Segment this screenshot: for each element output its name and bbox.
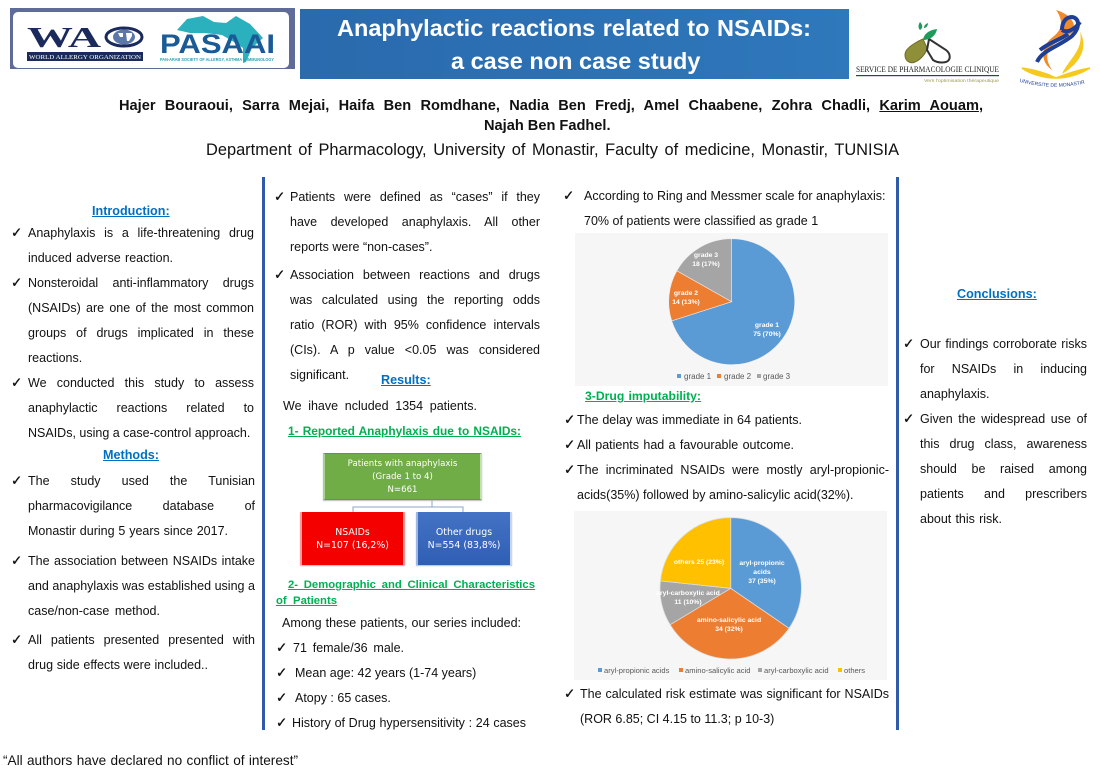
- bullet: hypersensitivity: ✓: [276, 715, 287, 731]
- bullet: ROR association: Association between reactions and drugs: [290, 268, 540, 282]
- bullet: association method: The association between NSAIDs intake: [28, 554, 255, 568]
- heading: methods: Methods:: [103, 448, 159, 462]
- bullet: incriminated NSAIDs: The incriminated NSAIDs were mostly aryl-propionic-: [577, 463, 889, 477]
- pie labels: 18 (17%): [692, 261, 720, 268]
- pie labels: [672, 252, 781, 338]
- legend: grade 2: [724, 372, 752, 381]
- bullet: sex ratio: 71 female/36 male.: [293, 641, 404, 655]
- slice: grade 3: [677, 239, 732, 302]
- logo: Service de pharmacologie clinique: Vers l'optimisation thérapeutique: [924, 78, 999, 83]
- pie labels: 14 (13%): [672, 299, 700, 306]
- bullet: database: ✓: [11, 473, 22, 489]
- bullet: Ring and Messmer: 70% of patients were classified as grade 1: [584, 214, 818, 228]
- logo banner: WAO and PASAAI: PASAAI: [160, 29, 275, 59]
- bullet: inclusion: [11, 632, 255, 672]
- bullet: risk estimate: [564, 686, 889, 726]
- text: Najah Ben Fadhel.: [484, 118, 611, 134]
- logo banner: WAO and PASAAI: PAN-ARAB SOCIETY OF ALLERGY, ASTHMA & IMMUNOLOGY: [160, 57, 274, 62]
- bullet: risk estimate: The calculated risk estimate was significant for NSAIDs: [580, 687, 889, 701]
- heading: demographic characteristics: 2- Demographic and Clinical Characteristics: [288, 579, 535, 591]
- bullet: risk estimate: ✓: [564, 686, 575, 702]
- bullet: study aim: NSAIDs, using a case-control approach.: [28, 426, 250, 440]
- bullet: NSAIDs: [11, 275, 254, 365]
- bullet: inclusion: All patients presented presented with: [28, 633, 255, 647]
- bullet: ROR association: significant.: [290, 368, 349, 382]
- pie labels: aryl-carboxylic acid: [656, 590, 720, 597]
- bullet: case definition: have developed anaphylaxis. All other: [290, 215, 540, 229]
- bullet: mean age: ✓: [276, 665, 287, 681]
- bullet: findings: for NSAIDs in inducing: [920, 362, 1087, 376]
- heading: conclusions: Conclusions:: [957, 287, 1037, 301]
- bullet: ROR association: (CIs). A p value <0.05 was considered: [290, 343, 540, 357]
- legend: amino-salicylic acid: [685, 666, 750, 675]
- bullet: NSAIDs: Nonsteroidal anti-inflammatory drugs: [28, 276, 254, 290]
- box: NSAIDs: [300, 512, 405, 565]
- pie labels: 37 (35%): [748, 578, 776, 585]
- legend: aryl-propionic acids: [604, 666, 670, 675]
- logo banner: WAO and PASAAI: WORLD ALLERGY ORGANIZATION: [29, 54, 141, 61]
- affiliation: Department of Pharmacology, University of Monastir, Faculty of medicine, Monastir, TUNISIA: [206, 141, 899, 159]
- bullet: incriminated NSAIDs: ✓: [564, 462, 575, 478]
- logo: Service de pharmacologie clinique: SERVICE DE PHARMACOLOGIE CLINIQUE: [856, 64, 999, 74]
- bullet: anaphylaxis definition: Anaphylaxis is a life-threatening drug: [28, 226, 254, 240]
- bullet: anaphylaxis definition: induced adverse reaction.: [28, 251, 173, 265]
- legend: others: [844, 666, 865, 675]
- slice: others: [660, 518, 731, 588]
- bullet: association method: and anaphylaxis was established using a: [28, 579, 255, 593]
- bullet: awareness: Given the widespread use of: [920, 412, 1087, 426]
- bullet: database: pharmacovigilance database of: [28, 499, 255, 513]
- bullet: NSAIDs: groups of drugs implicated in these: [28, 326, 254, 340]
- bullet: awareness: patients and prescribers: [920, 487, 1087, 501]
- bullet: hypersensitivity: History of Drug hypersensitivity : 24 cases: [292, 716, 526, 730]
- divider right: [896, 177, 899, 730]
- bullet: Ring and Messmer: [563, 188, 886, 228]
- bullet: study aim: ✓: [11, 375, 22, 391]
- heading: drug imputability: 3-Drug imputability:: [585, 389, 701, 403]
- text: patients included: We ihave ncluded 1354 patients.: [283, 399, 477, 413]
- bullet: incriminated NSAIDs: [564, 462, 889, 502]
- slice: aryl-carboxylic acid: [660, 581, 731, 625]
- bullet: NSAIDs: reactions.: [28, 351, 82, 365]
- bullet: sex ratio: ✓: [276, 640, 287, 656]
- bullet: findings: anaphylaxis.: [920, 387, 990, 401]
- pie labels: acids: [753, 569, 771, 576]
- slice: aryl-propionic acids: [731, 518, 801, 628]
- bullet: case definition: Patients were defined as “cases” if they: [290, 190, 540, 204]
- pie labels: 34 (32%): [715, 626, 743, 633]
- pie labels: [656, 559, 785, 633]
- bullet: atopy: Atopy : 65 cases.: [295, 691, 391, 705]
- pie labels: others 25 (23%): [674, 559, 724, 566]
- flowchart: [300, 453, 512, 566]
- pie labels: 75 (70%): [753, 331, 781, 338]
- bullet: case definition: [274, 189, 540, 254]
- title banner: a case non case study: [451, 48, 700, 74]
- pie labels: grade 1: [755, 322, 779, 329]
- flowchart connectors: [352, 500, 464, 512]
- heading: reported anaphylaxis: 1- Reported Anaphylaxis due to NSAIDs:: [288, 424, 521, 438]
- bullet: study aim: anaphylactic reactions related to: [28, 401, 254, 415]
- bullet: findings: [903, 336, 1087, 401]
- title banner: [300, 9, 849, 79]
- authors: [119, 98, 983, 134]
- bullet: database: The study used the Tunisian: [28, 474, 255, 488]
- box: other drugs: [416, 512, 512, 565]
- logo: Université de Monastir: UNIVERSITE DE MONASTIR: [1020, 78, 1085, 87]
- bullet: anaphylaxis definition: ✓: [11, 225, 22, 241]
- bullet: awareness: about this risk.: [920, 512, 1002, 526]
- bullet: outcome: ✓: [564, 437, 575, 453]
- box: patients with anaphylaxis: (Grade 1 to 4): [372, 472, 433, 482]
- box: other drugs: Other drugs: [436, 527, 492, 538]
- box: other drugs: N=554 (83,8%): [428, 540, 500, 551]
- chart: NSAID class pie: [574, 511, 887, 680]
- bullet: Ring and Messmer: According to Ring and Messmer scale for anaphylaxis:: [584, 189, 886, 203]
- slice: grade 1: [672, 239, 795, 365]
- bullet: database: [11, 473, 255, 538]
- logo banner: WAO and PASAAI: [10, 8, 295, 69]
- pie labels: 11 (10%): [674, 599, 702, 606]
- legend: grade 1: [684, 372, 712, 381]
- heading: introduction: Introduction:: [92, 204, 170, 218]
- box: patients with anaphylaxis: [323, 453, 482, 500]
- legend: aryl-carboxylic acid: [764, 666, 829, 675]
- pie labels: grade 3: [694, 252, 718, 259]
- bullet: awareness: this drug class, awareness: [920, 437, 1087, 451]
- bullet: inclusion: ✓: [11, 632, 22, 648]
- authors: Hajer Bouraoui, Sarra Mejai, Haifa Ben Romdhane, Nadia Ben Fredj, Amel Chaabene, Zohra Chadli, Karim Aouam,: [119, 98, 983, 114]
- bullet: association method: case/non-case method.: [28, 604, 160, 618]
- logo: Service de pharmacologie clinique: [856, 22, 999, 83]
- pie labels: aryl-propionic: [739, 560, 785, 567]
- bullet: Ring and Messmer: ✓: [563, 188, 574, 204]
- bullet: study aim: We conducted this study to assess: [28, 376, 254, 390]
- bullet: ROR association: ✓: [274, 267, 285, 283]
- legend: grade 3: [763, 372, 791, 381]
- bullet: ROR association: [274, 267, 540, 382]
- heading: demographic characteristics: of Patients: [276, 595, 337, 607]
- bullet: ROR association: ratio (ROR) with 95% confidence intervals: [290, 318, 540, 332]
- bullet: anaphylaxis definition: [11, 225, 254, 265]
- box: patients with anaphylaxis: N=661: [387, 485, 418, 495]
- bullet: NSAIDs: (NSAIDs) are one of the most common: [28, 301, 254, 315]
- bullet: inclusion: drug side effects were included..: [28, 658, 208, 672]
- box: NSAIDs: N=107 (16,2%): [316, 540, 389, 551]
- bullet: association method: [11, 553, 255, 618]
- pie labels: amino-salicylic acid: [697, 617, 761, 624]
- title banner: Anaphylactic reactions related to NSAIDs:: [337, 15, 811, 41]
- heading: results: Results:: [381, 373, 431, 387]
- bullet: association method: ✓: [11, 553, 22, 569]
- heading: demographic characteristics: [276, 579, 535, 607]
- bullet: delay: ✓: [564, 412, 575, 428]
- bullet: incriminated NSAIDs: acids(35%) followed by amino-salicylic acid(32%).: [577, 488, 854, 502]
- logo banner: WAO and PASAAI: WA: [27, 22, 101, 54]
- box: patients with anaphylaxis: Patients with anaphylaxis: [348, 459, 457, 469]
- bullet: study aim: [11, 375, 254, 440]
- bullet: mean age: Mean age: 42 years (1-74 years): [295, 666, 476, 680]
- bullet: findings: Our findings corroborate risks: [920, 337, 1087, 351]
- box: NSAIDs: NSAIDs: [335, 527, 370, 538]
- legend: [598, 666, 865, 675]
- bullet: case definition: ✓: [274, 189, 285, 205]
- divider left: [262, 177, 265, 730]
- bullet: database: Monastir during 5 years since 2017.: [28, 524, 228, 538]
- bullet: awareness: ✓: [903, 411, 914, 427]
- logo: Université de Monastir: [1020, 10, 1090, 87]
- legend: [677, 372, 791, 381]
- bullet: atopy: ✓: [276, 690, 287, 706]
- text: series intro: Among these patients, our series included:: [282, 616, 521, 630]
- chart: grade pie: [575, 233, 888, 386]
- bullet: case definition: reports were “non-cases”.: [290, 240, 432, 254]
- bullet: awareness: should be raised among: [920, 462, 1087, 476]
- pie labels: grade 2: [674, 290, 698, 297]
- bullet: outcome: All patients had a favourable outcome.: [577, 438, 794, 452]
- bullet: delay: The delay was immediate in 64 patients.: [577, 413, 802, 427]
- bullet: awareness: [903, 411, 1087, 526]
- bullet: ROR association: was calculated using the reporting odds: [290, 293, 540, 307]
- bullet: findings: ✓: [903, 336, 914, 352]
- bullet: risk estimate: (ROR 6.85; CI 4.15 to 11.3; p 10-3): [580, 712, 774, 726]
- slice: grade 2: [669, 271, 732, 321]
- footer note: “All authors have declared no conflict of interest”: [3, 753, 298, 768]
- bullet: NSAIDs: ✓: [11, 275, 22, 291]
- slice: amino-salicylic acid: [670, 588, 789, 659]
